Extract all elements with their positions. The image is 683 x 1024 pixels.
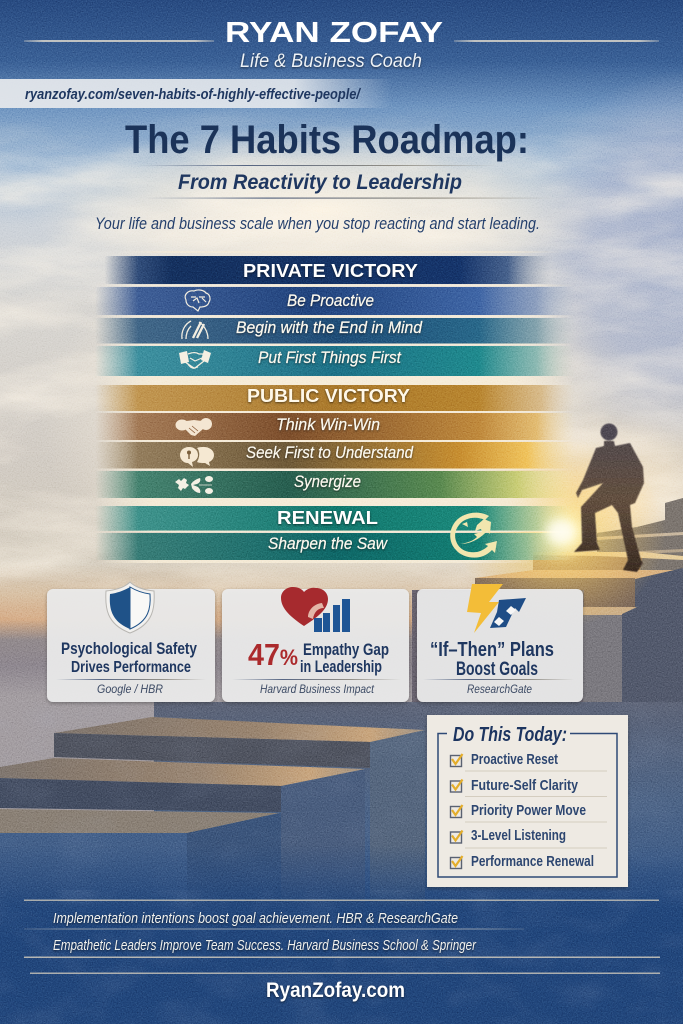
url bar: ryanzofay.com/seven-habits-of-highly-effective-people/ — [25, 86, 362, 103]
habit bands — [95, 251, 575, 563]
checklist item: 3-level listening: 3-Level Listening — [471, 827, 566, 844]
card: psychological safety: Google / HBR — [97, 682, 163, 696]
checklist item: proactive reset: Proactive Reset — [471, 751, 558, 768]
checklist item: performance renewal — [450, 853, 594, 870]
subtitle: From Reactivity to Leadership — [178, 171, 462, 194]
habit: be proactive: Be Proactive — [287, 291, 374, 310]
stat: 47%: 47% — [248, 637, 298, 672]
source line: implementation intentions: Implementation intentions boost goal achievement. HBR & ResearchGate — [53, 911, 458, 927]
band labels — [236, 261, 422, 553]
card: empathy gap: Empathy Gap — [303, 640, 389, 659]
sky background — [0, 34, 683, 812]
card: empathy gap — [222, 587, 409, 702]
icon: renewal cycle arrow — [450, 513, 497, 558]
sun glow — [456, 437, 666, 627]
figure climbing stairs — [574, 424, 644, 572]
card: if-then plans: Boost Goals — [456, 659, 538, 680]
source line: empathetic leaders: Empathetic Leaders Improve Team Success. Harvard Business School & Springer — [53, 938, 477, 954]
header: name: RYAN ZOFAY — [225, 17, 443, 49]
habit: begin with the end in mind: Begin with the End in Mind — [236, 318, 422, 337]
upper stairs on the right — [412, 498, 683, 702]
footer sources — [24, 900, 660, 974]
title: The 7 Habits Roadmap: — [125, 118, 529, 162]
checklist item: priority power move — [450, 802, 586, 819]
icon: heart and bars — [281, 587, 350, 632]
url bar — [0, 79, 392, 108]
habit: put first things first: Put First Things First — [258, 348, 402, 367]
heading: private victory: PRIVATE VICTORY — [243, 261, 418, 281]
staircase — [0, 498, 683, 1024]
checklist item: priority power move: Priority Power Move — [471, 802, 586, 819]
stat cards — [47, 582, 583, 702]
icon: speedometer — [182, 321, 208, 339]
habit: think win-win: Think Win-Win — [276, 415, 380, 434]
icon: shield — [106, 582, 154, 633]
panel: do this today — [427, 715, 628, 887]
checklist item: performance renewal: Performance Renewal — [471, 853, 594, 870]
card: psychological safety: Drives Performance — [71, 659, 191, 676]
card: empathy gap: Harvard Business Impact — [260, 682, 375, 696]
card: psychological safety: Psychological Safety — [61, 639, 197, 658]
icon: brain — [185, 290, 210, 311]
header: role: Life & Business Coach — [240, 51, 422, 72]
habit: synergize: Synergize — [294, 472, 361, 491]
icon: bolt and arrow — [467, 584, 526, 633]
card: empathy gap: in Leadership — [300, 657, 382, 676]
tagline: Your life and business scale when you stop reacting and start leading. — [95, 215, 540, 233]
habit: sharpen the saw: Sharpen the Saw — [268, 534, 389, 553]
left steps — [0, 717, 425, 960]
icon: speech bubbles — [180, 447, 214, 467]
card: if-then plans — [417, 584, 583, 702]
footer website: RyanZofay.com — [266, 979, 405, 1002]
checklist item: 3-level listening — [450, 827, 566, 844]
card: psychological safety — [47, 582, 215, 702]
icon: handshake solid — [176, 418, 212, 436]
card: if-then plans: “If–Then” Plans — [430, 639, 554, 661]
heading: public victory: PUBLIC VICTORY — [247, 386, 410, 406]
icon: handshake — [179, 350, 211, 368]
heading: renewal: RENEWAL — [277, 508, 378, 528]
sun core — [546, 519, 576, 545]
card: if-then plans: ResearchGate — [467, 682, 532, 696]
checklist item: future-self clarity: Future-Self Clarity — [471, 777, 579, 794]
heading: Do This Today: — [453, 724, 567, 746]
checklist item: proactive reset — [450, 751, 558, 768]
habit: seek first to understand: Seek First to Understand — [246, 443, 413, 462]
icon: synergy — [175, 476, 213, 494]
